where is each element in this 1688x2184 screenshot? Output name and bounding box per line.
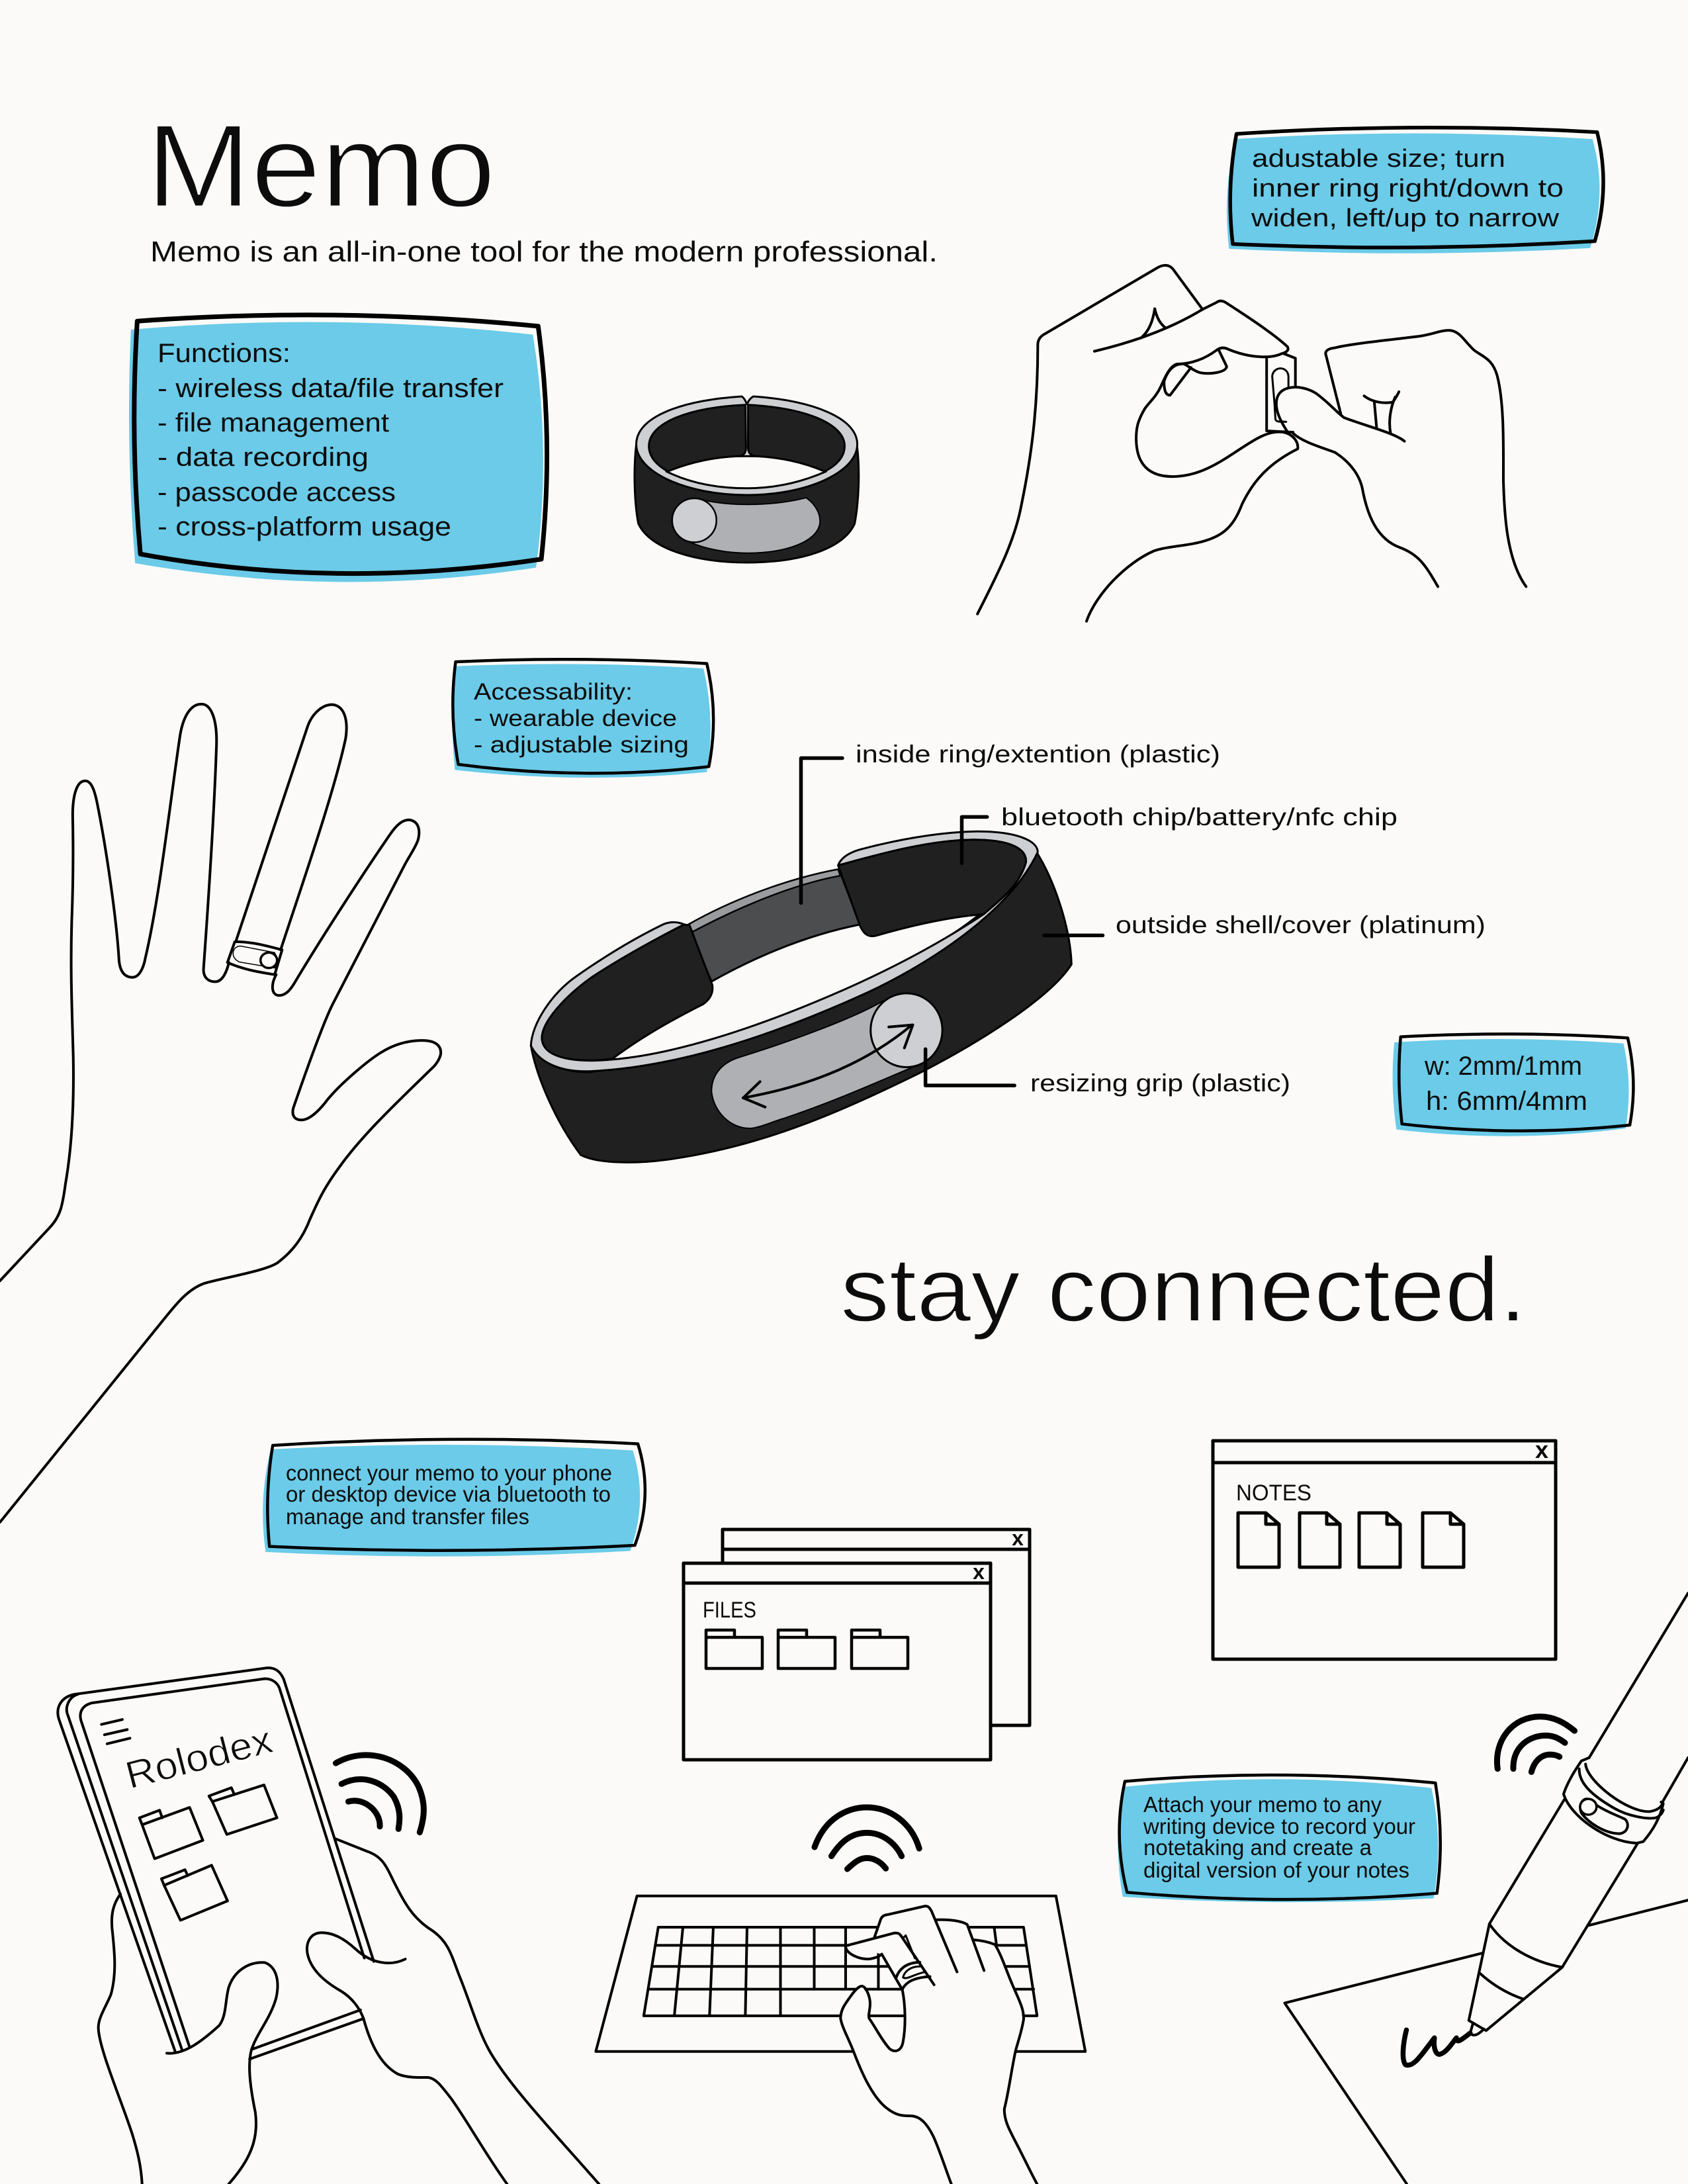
panel: functions callout: - file management (157, 408, 389, 437)
window: files: x (973, 1560, 985, 1584)
illustration: hands holding phone (58, 1668, 599, 2184)
panel: functions callout: - data recording (157, 443, 369, 472)
panel: accessability callout: - wearable device (474, 705, 677, 731)
extension top strip (688, 869, 840, 932)
panel: functions callout: Functions: (157, 339, 290, 368)
hand mask (840, 1906, 1037, 2184)
inner plastic extension (689, 873, 860, 981)
window: files (684, 1526, 1030, 1760)
right hand (335, 1839, 599, 2184)
leader: resizing grip (926, 1049, 1014, 1085)
panel: adjustable size callout: widen, left/up to narrow (1251, 205, 1560, 232)
panel: adjustable size callout: inner ring right/down to (1252, 175, 1564, 203)
illustration: hands resizing the ring (977, 265, 1526, 621)
label: NOTES (1236, 1480, 1311, 1506)
panel: connect callout: or desktop device via bluetooth to (286, 1482, 611, 1506)
panel: connect callout: manage and transfer files (286, 1504, 529, 1529)
label: bluetooth chip: bluetooth chip/battery/nfc chip (1001, 803, 1398, 831)
panel: accessability callout: Accessability: (474, 679, 633, 705)
panel: attach callout: notetaking and create a (1143, 1835, 1372, 1860)
diagram: exploded memo ring band (531, 758, 1103, 1162)
key grid (644, 1927, 1037, 2016)
icon: wifi signal (815, 1807, 919, 1869)
label: outside shell: outside shell/cover (platinum) (1116, 911, 1486, 938)
left inner panel (542, 925, 713, 1060)
panel: attach callout: writing device to record your (1143, 1814, 1415, 1839)
illustration: keyboard with hand (596, 1807, 1085, 2184)
panel: dimensions callout: h: 6mm/4mm (1426, 1087, 1587, 1116)
panel: dimensions callout: w: 2mm/1mm (1424, 1052, 1582, 1081)
folder icons (706, 1630, 908, 1668)
panel: accessability callout (452, 659, 713, 778)
left hand (99, 1894, 142, 2184)
pen tip sections (1470, 1924, 1562, 2035)
resizing grip track (711, 1001, 918, 1128)
label: FILES (703, 1598, 756, 1623)
ring on finger (228, 942, 282, 975)
label: inside ring: inside ring/extention (plastic) (856, 741, 1220, 768)
panel: functions callout: - passcode access (157, 478, 396, 507)
ring on pen (1564, 1758, 1664, 1843)
leader: inside ring (801, 758, 842, 903)
hand outline (840, 1906, 1037, 2184)
icon: wifi signal (1497, 1717, 1575, 1772)
arrow: slide direction (743, 1025, 913, 1107)
note icons (1238, 1513, 1464, 1567)
leader: bluetooth chip (961, 817, 987, 863)
panel: connect callout: connect your memo to your phone (286, 1461, 612, 1485)
right inner panel: chips (838, 840, 1026, 936)
outer shell (531, 852, 1071, 1162)
keyboard body (596, 1896, 1085, 2052)
menu icon (101, 1719, 130, 1744)
title: Memo: Memo (146, 100, 496, 232)
panel: connect callout (263, 1439, 645, 1557)
heading: stay connected: stay connected. (840, 1239, 1527, 1341)
panel: functions callout: - wireless data/file transfer (157, 374, 504, 403)
right thumb (307, 1933, 507, 2184)
window: files: x (1012, 1526, 1024, 1550)
icon: memo ring product view (635, 396, 859, 563)
panel: functions callout: - cross-platform usage (157, 512, 451, 541)
icon: wifi signal (335, 1755, 423, 1833)
pen barrel (1469, 1593, 1688, 2030)
panel: attach callout: Attach your memo to any (1143, 1792, 1382, 1817)
subtitle: Memo is an all-in-one tool for the modern professional. (150, 236, 938, 268)
panel: attach callout (1118, 1775, 1441, 1902)
panel: adjustable size callout: adustable size; turn (1252, 145, 1505, 173)
phone screen title: Rolodex (121, 1718, 277, 1797)
illustration: pen with ring writing on paper (1285, 1593, 1688, 2184)
label: resizing grip: resizing grip (plastic) (1030, 1069, 1290, 1097)
resizing knob (871, 993, 942, 1067)
paper (1285, 1900, 1688, 2184)
panel: adjustable size callout (1227, 128, 1603, 253)
panel: functions callout (129, 315, 547, 582)
phone body (58, 1668, 374, 2059)
panel: attach callout: digital version of your notes (1143, 1858, 1409, 1882)
illustration: hand wearing the ring (0, 704, 441, 1522)
leader: outside shell (1044, 934, 1103, 937)
panel: accessability callout: - adjustable sizing (474, 732, 689, 758)
window: notes (1213, 1436, 1556, 1659)
scribble (1403, 2030, 1470, 2066)
panel: dimensions callout (1393, 1034, 1633, 1136)
platinum rim (531, 831, 1038, 1071)
left thumb (167, 1962, 278, 2184)
close icon: x (1535, 1436, 1548, 1463)
folder icons (140, 1785, 277, 1921)
